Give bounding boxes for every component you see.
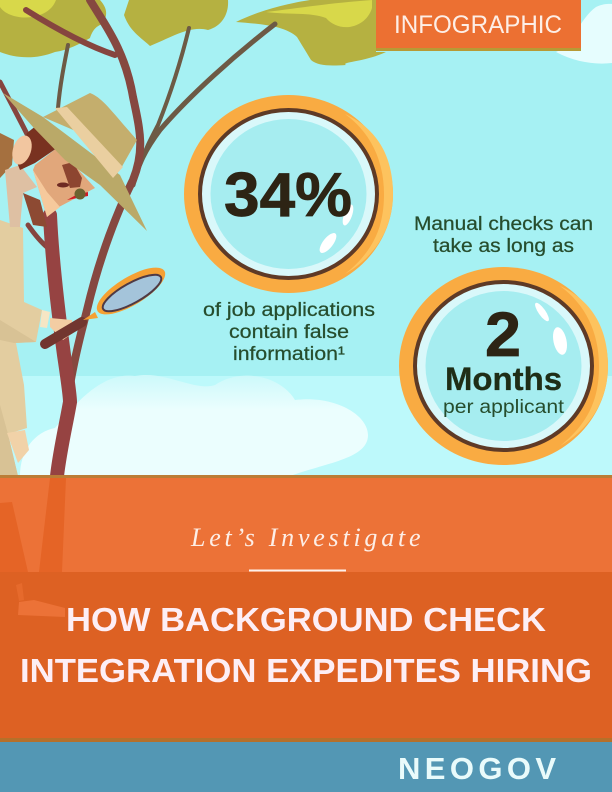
hat: [43, 93, 137, 170]
clouds: [20, 4, 612, 476]
magnifying glass: [45, 259, 172, 344]
orange band: [0, 475, 612, 742]
caption: false information: [203, 300, 375, 365]
stat note: per applicant: [443, 397, 565, 418]
hair and collar: [0, 133, 14, 178]
caption: manual checks: [414, 214, 593, 257]
caption: false information: information¹: [233, 344, 345, 365]
subtitle: Let’s Investigate: [190, 523, 422, 552]
main title: [20, 601, 592, 689]
stat circle: 2 months: [399, 267, 608, 465]
detective figure: [0, 93, 147, 476]
footer bar: [0, 742, 612, 792]
caption: manual checks: Manual checks can: [414, 214, 593, 235]
caption: false information: of job applications: [203, 300, 375, 321]
stat circle: 34%: [184, 95, 393, 293]
face: [33, 147, 95, 217]
stat value: 34%: [224, 161, 352, 230]
stat unit: Months: [445, 361, 562, 397]
infographic tag: INFOGRAPHIC: [394, 11, 562, 39]
caption: manual checks: take as long as: [433, 236, 574, 257]
caption: false information: contain false: [229, 322, 349, 343]
main title: INTEGRATION EXPEDITES HIRING: [20, 652, 592, 689]
sky background: [0, 0, 612, 480]
coat: [0, 220, 42, 476]
sleeve cuff and hands: [40, 310, 50, 328]
main title: HOW BACKGROUND CHECK: [66, 601, 546, 638]
tree foliage: [0, 0, 386, 65]
stat value: 2: [485, 300, 521, 370]
logo: NEOGOV: NEOGOV: [398, 751, 559, 786]
tree trunk and branches: [0, 0, 275, 476]
infographic tag: [376, 0, 581, 51]
